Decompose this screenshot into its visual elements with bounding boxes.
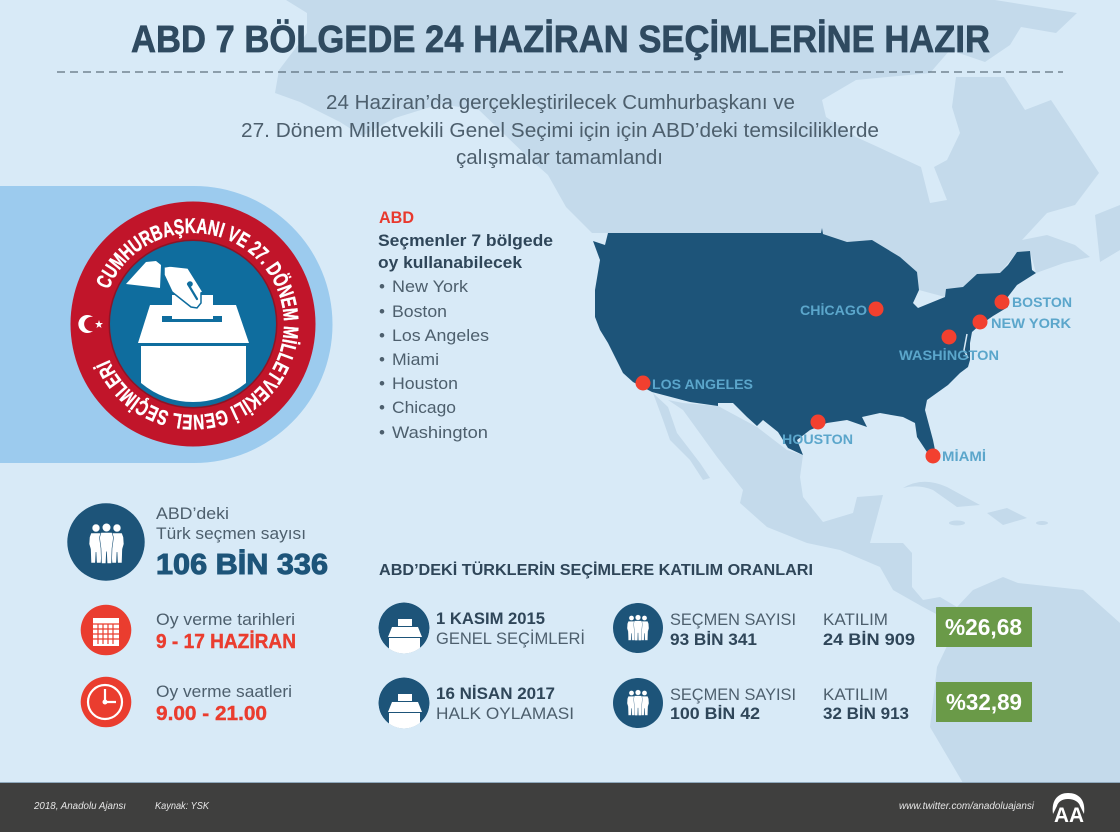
icon: clock bbox=[81, 677, 131, 727]
stat: Turkish voters in the USA: Türk seçmen sayısı bbox=[156, 524, 306, 543]
city list: Washington bbox=[392, 423, 488, 442]
row: 16 Nisan 2017: HALK OYLAMASI bbox=[436, 704, 574, 723]
footer bbox=[0, 782, 1120, 832]
text block: ABD voting regions bbox=[378, 209, 553, 442]
row: 1 Kasım 2015: GENEL SEÇİMLERİ bbox=[436, 629, 585, 648]
city list: • bbox=[379, 374, 385, 393]
map: United States with polling cities bbox=[593, 228, 1072, 464]
marker: Boston: BOSTON bbox=[1012, 294, 1072, 310]
marker: Houston: HOUSTON bbox=[782, 431, 853, 447]
intro text: çalışmalar tamamlandı bbox=[456, 147, 663, 169]
marker: Washington bbox=[899, 330, 999, 363]
row: 1 Kasım 2015: 24 BİN 909 bbox=[823, 630, 915, 649]
badge: rate: %32,89 bbox=[946, 689, 1022, 715]
row: 1 Kasım 2015: 93 BİN 341 bbox=[670, 630, 757, 649]
footer: 2018, Anadolu Ajansı bbox=[33, 801, 126, 812]
row: 1 Kasım 2015: SEÇMEN SAYISI bbox=[670, 610, 796, 629]
blue disc bbox=[110, 241, 276, 407]
stat: voting hours: 9.00 - 21.00 bbox=[156, 703, 267, 725]
marker: Miami bbox=[926, 448, 986, 464]
stat: voting dates: Oy verme tarihleri bbox=[156, 610, 295, 629]
US silhouette bbox=[593, 228, 1036, 455]
intro text bbox=[241, 92, 879, 169]
city list: Chicago bbox=[392, 398, 456, 417]
background map: North and South America bbox=[275, 0, 1120, 783]
logo: Anadolu Ajansı bbox=[1053, 793, 1084, 827]
icon: ballot box and hand bbox=[126, 261, 249, 402]
city list: New York bbox=[392, 277, 469, 296]
stat: voting hours bbox=[81, 677, 292, 727]
marker: New York: NEW YORK bbox=[991, 315, 1071, 331]
icon: voters bbox=[613, 603, 663, 653]
icon: ballot box bbox=[378, 602, 430, 656]
intro text: 27. Dönem Milletvekili Genel Seçimi için için ABD’deki temsilciliklerde bbox=[241, 120, 879, 142]
row: 16 Nisan 2017: 32 BİN 913 bbox=[823, 704, 909, 723]
city list: • bbox=[379, 398, 385, 417]
marker: Miami: MİAMİ bbox=[942, 448, 986, 464]
red ring bbox=[70, 202, 316, 446]
marker: Los Angeles: LOS ANGELES bbox=[652, 376, 753, 392]
row: 16 Nisan 2017 bbox=[378, 678, 1032, 731]
text block: ABD voting regions: ABD bbox=[379, 209, 414, 227]
icon: ballot box bbox=[378, 678, 430, 731]
title: ABD 7 BÖLGEDE 24 HAZİRAN SEÇİMLERİNE HAZIR bbox=[131, 18, 990, 61]
stat: Turkish voters in the USA: 106 BİN 336 bbox=[156, 549, 328, 581]
stat: Turkish voters in the USA bbox=[67, 503, 328, 581]
panel: election emblem bbox=[0, 186, 332, 463]
icon: calendar bbox=[81, 605, 131, 655]
intro text: 24 Haziran’da gerçekleştirilecek Cumhurbaşkanı ve bbox=[326, 92, 795, 114]
stat: voting dates bbox=[81, 605, 296, 655]
marker: Washington: WASHİNGTON bbox=[899, 347, 999, 363]
city list: Boston bbox=[392, 302, 447, 321]
row: 1 Kasım 2015: KATILIM bbox=[823, 610, 888, 629]
badge: rate bbox=[936, 682, 1032, 722]
city list: Houston bbox=[392, 374, 458, 393]
marker: Chicago: CHİCAGO bbox=[800, 302, 867, 318]
stat: voting hours: Oy verme saatleri bbox=[156, 682, 292, 701]
city list: • bbox=[379, 302, 385, 321]
light blue tab bbox=[0, 186, 332, 463]
footer: www.twitter.com/anadoluajansi bbox=[899, 801, 1035, 812]
city list: • bbox=[379, 277, 385, 296]
stat: Turkish voters in the USA: ABD’deki bbox=[156, 504, 229, 523]
badge: rate bbox=[936, 607, 1032, 647]
city list: Los Angeles bbox=[392, 326, 489, 345]
row: 16 Nisan 2017: KATILIM bbox=[823, 685, 888, 704]
icon: voters bbox=[67, 503, 145, 581]
Chesapeake Bay bbox=[964, 334, 968, 358]
row: 16 Nisan 2017: 100 BİN 42 bbox=[670, 704, 760, 723]
city list: • bbox=[379, 423, 385, 442]
marker: Houston bbox=[782, 414, 853, 447]
row: 1 Kasım 2015: 1 KASIM 2015 bbox=[436, 609, 545, 628]
row: 16 Nisan 2017: 16 NİSAN 2017 bbox=[436, 684, 555, 703]
icon: voters bbox=[613, 678, 663, 728]
row: 16 Nisan 2017: SEÇMEN SAYISI bbox=[670, 685, 796, 704]
city list: • bbox=[379, 350, 385, 369]
city list: • bbox=[379, 326, 385, 345]
footer: Kaynak: YSK bbox=[155, 801, 210, 812]
logo: Anadolu Ajansı: AA bbox=[1054, 804, 1084, 827]
row: 1 Kasım 2015 bbox=[378, 602, 1032, 656]
text block: ABD voting regions: Seçmenler 7 bölgede bbox=[378, 232, 553, 250]
city list: Miami bbox=[392, 350, 439, 369]
stat: voting dates: 9 - 17 HAZİRAN bbox=[156, 630, 296, 653]
curved ring text: CUMHURBAŞKANI VE 27. DÖNEM MİLLETVEKİLİ GENEL SEÇİMLERİ bbox=[92, 218, 301, 430]
participation heading: ABD’DEKİ TÜRKLERİN SEÇİMLERE KATILIM ORANLARI bbox=[379, 560, 813, 579]
badge: rate: %26,68 bbox=[945, 614, 1022, 640]
text block: ABD voting regions: oy kullanabilecek bbox=[378, 254, 523, 272]
city list bbox=[379, 277, 489, 442]
icon: crescent and star bbox=[78, 315, 103, 333]
